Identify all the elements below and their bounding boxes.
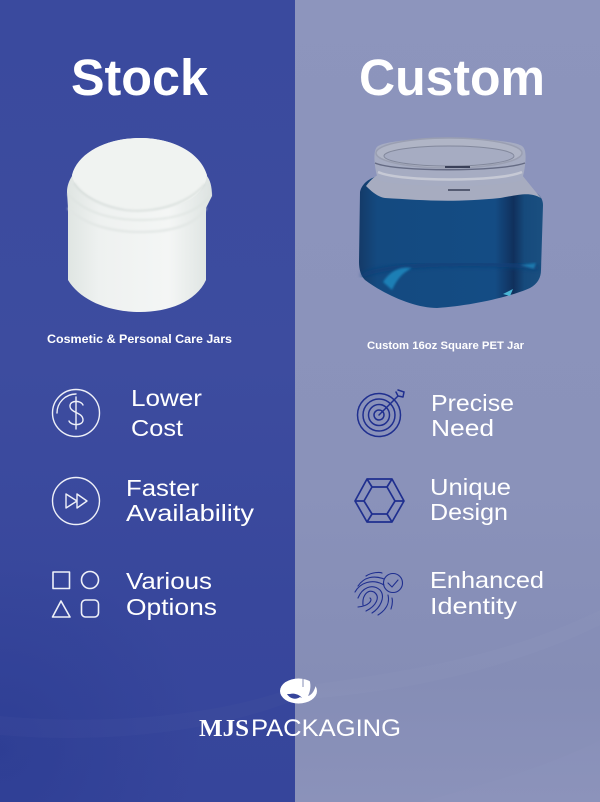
icon: fast forward	[52, 478, 100, 524]
label: Unique Design: Unique	[430, 474, 511, 500]
panel: stock background	[0, 0, 295, 802]
image: white stock jar	[67, 138, 212, 312]
label: Various Options: Various	[126, 568, 212, 594]
caption: custom jar: Custom 16oz Square PET Jar	[367, 340, 525, 352]
icon: fingerprint with check	[355, 572, 402, 615]
panel: custom background	[295, 0, 600, 802]
title: Custom: Custom	[359, 49, 545, 106]
label: Lower Cost: Cost	[131, 415, 184, 441]
label: Lower Cost	[131, 385, 202, 441]
label: Various Options	[126, 568, 217, 620]
label: Unique Design: Design	[430, 499, 508, 525]
label: Precise Need	[431, 390, 514, 441]
label: Unique Design	[430, 474, 511, 525]
label: Faster Availability: Availability	[126, 500, 255, 526]
label: Faster Availability: Faster	[126, 475, 199, 501]
logo wordmark: PACKAGING	[251, 715, 401, 742]
label: Enhanced Identity: Identity	[430, 593, 518, 619]
icon: hexagon gem	[355, 479, 404, 522]
logo wordmark: MJS	[199, 716, 249, 742]
label: Lower Cost: Lower	[131, 385, 202, 411]
caption: stock jar: Cosmetic & Personal Care Jars	[47, 334, 232, 346]
icon: dollar coin	[52, 390, 100, 436]
logo wordmark	[199, 715, 401, 742]
title: Stock: Stock	[71, 49, 209, 106]
label: Enhanced Identity	[430, 567, 544, 619]
label: Precise Need: Need	[431, 415, 494, 441]
logo mark	[280, 678, 317, 704]
image: blue custom square jar	[359, 138, 543, 308]
icon: shapes	[52, 572, 98, 617]
icon: target	[358, 390, 404, 436]
label: Faster Availability	[126, 475, 255, 526]
label: Enhanced Identity: Enhanced	[430, 567, 544, 593]
label: Precise Need: Precise	[431, 390, 514, 416]
logo: MJS Packaging	[199, 678, 401, 742]
label: Various Options: Options	[126, 594, 217, 620]
